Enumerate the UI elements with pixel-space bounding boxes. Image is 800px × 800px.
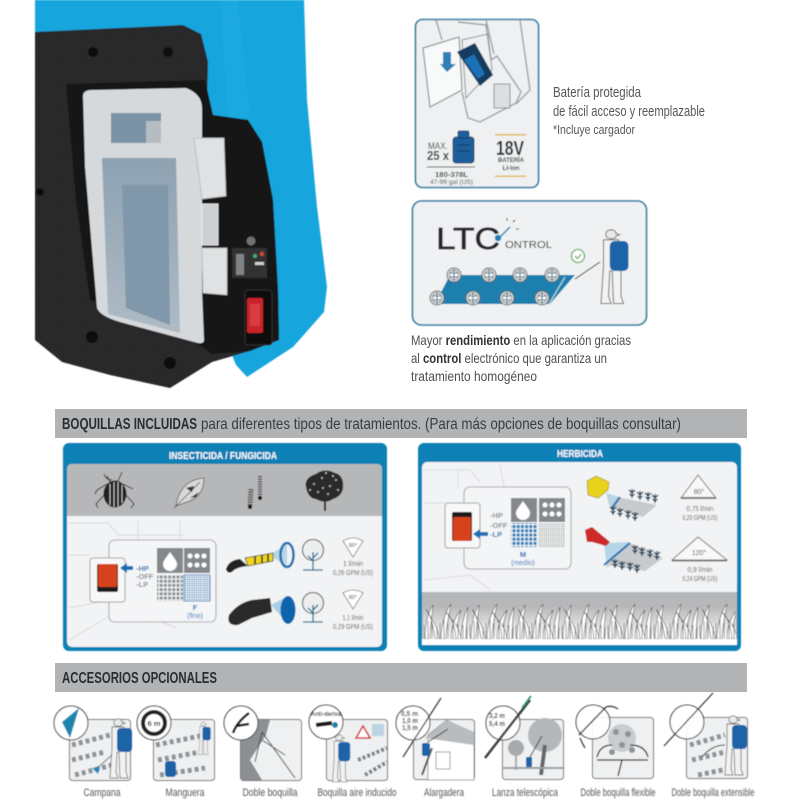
accessory: lanza telescopica: 3,2 m (489, 713, 505, 720)
18V badge (495, 134, 526, 177)
pressure labels: -LP (136, 580, 148, 589)
tree icon 1 (302, 540, 324, 570)
accessories row (54, 693, 754, 799)
spray angle and flow 1 (333, 538, 373, 577)
battery description text (553, 85, 705, 137)
pressure labels: -OFF (490, 521, 508, 530)
LTC description text: tratamiento homogéneo (411, 368, 537, 384)
panel title: HERBICIDA (557, 448, 603, 460)
accessory: doble boquilla: Doble boquilla (242, 787, 298, 799)
accessory: campana: Campana (84, 787, 121, 799)
panel title: INSECTICIDA / FUNGICIDA (169, 450, 277, 462)
spray angle 80 degrees: 0,75 l/min (686, 504, 714, 513)
pressure labels: -HP (490, 511, 503, 520)
battery card (416, 20, 538, 188)
grass illustration (423, 604, 736, 639)
pressure labels (136, 564, 154, 589)
spray angle and flow 2: 80° (349, 595, 357, 601)
battery description text: de fácil acceso y reemplazable (553, 104, 705, 120)
label seen through cover (111, 113, 161, 143)
heading: accesorios opcionales (55, 663, 747, 692)
18V badge: Li-Ion (502, 166, 520, 172)
nozzle 2: black full cone (228, 596, 296, 625)
spray angle 80 degrees: 80° (694, 488, 704, 496)
accessory: boquilla aire inducido: Boquilla aire inducido (318, 787, 396, 799)
accessory: alargadera: 1,5 m (402, 725, 418, 732)
accessory: alargadera (396, 698, 474, 799)
rocker switch HP (90, 558, 125, 602)
LTC control card (412, 201, 646, 325)
accessory: alargadera: 0,5 m (401, 711, 418, 718)
cover centre latch (202, 204, 218, 245)
black rear panel (35, 25, 279, 388)
cover tabs (194, 138, 227, 295)
accessory: doble boquilla extensible: Doble boquilla extensible (672, 787, 754, 799)
accessory: doble boquilla (224, 706, 302, 799)
battery core shadow (122, 185, 170, 325)
farmer with backpack sprayer (575, 230, 628, 304)
accessory: lanza telescopica (485, 696, 564, 799)
icon: battery being inserted (423, 20, 530, 122)
control display (232, 248, 267, 278)
droplet size tiles (157, 548, 210, 601)
pressure labels (490, 511, 508, 539)
droplet label: M (520, 550, 526, 559)
panel: herbicida (418, 443, 741, 651)
icon: damaged leaf (174, 478, 204, 508)
control card: fine droplet (90, 540, 216, 622)
pressure arrow (120, 563, 133, 573)
icon: green check (572, 250, 584, 262)
pressure arrow (473, 529, 488, 539)
LTC description text: Mayor rendimiento en la aplicación gracias (411, 332, 631, 348)
grass band (422, 592, 737, 639)
heading: accesorios opcionales: ACCESORIOS OPCIONALES (62, 670, 217, 687)
spray angle 120 degrees (672, 537, 727, 583)
heading: boquillas incluidas: para diferentes tipos de tratamientos. (Para más opciones de boquillas consultar) (201, 416, 681, 433)
18V badge: 18V (496, 138, 525, 160)
battery description text: *Incluye cargador (553, 122, 636, 137)
spray angle and flow 1: 1 l/min (343, 561, 363, 568)
accessory: doble boquilla flexible: Doble boquilla flexible (580, 787, 656, 799)
spray angle 120 degrees: 120° (692, 549, 706, 557)
capacity text (427, 141, 475, 186)
spray angle 120 degrees: 0,9 l/min (688, 565, 712, 574)
rocker switch LP (445, 503, 480, 548)
white strip under the grass (422, 639, 737, 645)
accessory: boquilla aire inducido (309, 705, 396, 799)
spray angle and flow 1: 0,26 GPM (US) (333, 570, 373, 577)
nozzle red with field (585, 527, 663, 573)
pressure labels: -HP (136, 564, 149, 573)
spray angle and flow 2: 0,29 GPM (US) (333, 624, 373, 631)
icon: larvae (248, 476, 262, 509)
pressure labels: -LP (490, 530, 502, 539)
capacity text: MAX. (428, 141, 448, 151)
accessory: alargadera: Alargadera (424, 787, 465, 799)
LTC description text (411, 332, 631, 384)
screws (36, 47, 176, 369)
accessory: alargadera: 1,0 m (402, 718, 418, 725)
LTC logo: LTC (436, 221, 500, 256)
battery seen through cover (102, 158, 180, 333)
sprayer outline backdrop (69, 520, 185, 640)
grass fade (423, 606, 736, 639)
accessory: doble boquilla flexible (576, 705, 656, 799)
spray angle 120 degrees: 0,24 GPM (US) (682, 574, 718, 583)
battery description text: Batería protegida (553, 85, 642, 101)
accessory: campana (54, 706, 132, 799)
power switch (245, 290, 272, 345)
droplet label: (medio) (511, 560, 535, 567)
droplet label: (fino) (187, 613, 203, 620)
spray angle 80 degrees: 0,20 GPM (US) (682, 513, 718, 522)
tank highlight (220, 0, 250, 118)
icon: battery capacity (453, 131, 474, 163)
accessory: lanza telescopica: Lanza telescópica (492, 787, 559, 799)
tree icon 2 (302, 592, 324, 622)
capacity text: 180-378L (435, 170, 468, 179)
accessory: manguera (137, 706, 214, 799)
sprayer outline backdrop (424, 465, 504, 590)
nozzle yellow with field (587, 476, 658, 521)
blue tank body (35, 0, 327, 377)
product photo: sprayer battery compartment (35, 0, 327, 388)
spray angle and flow 2 (333, 590, 373, 631)
accessory: manguera: 6 m (148, 719, 161, 728)
18V badge: BATERÍA (498, 156, 525, 164)
LTC logo: ONTROL (505, 240, 552, 251)
control card: medium droplet (445, 487, 571, 569)
heading: boquillas incluidas: BOQUILLAS INCLUIDAS (62, 416, 197, 433)
spray angle 80 degrees (681, 475, 718, 522)
droplet label (187, 603, 203, 620)
spray angle and flow 1: 80° (349, 543, 357, 549)
accessory: lanza telescopica: 5,4 m (489, 721, 505, 728)
icon: beetle (95, 472, 134, 508)
droplet size tiles (511, 498, 565, 547)
accessory: boquilla aire inducido: Anti-deriva (311, 711, 341, 718)
accessory: doble boquilla extensible (664, 693, 754, 799)
pressure labels: -OFF (136, 572, 154, 581)
capacity text: 47-99 gal (US) (430, 180, 473, 186)
pest band (67, 464, 382, 516)
sprayed field (430, 268, 575, 305)
droplet label: F (193, 603, 198, 612)
capacity text: 25 x (427, 148, 450, 163)
translucent battery cover (83, 88, 227, 343)
heading: boquillas incluidas (55, 409, 747, 438)
panel: insecticida / fungicida (63, 443, 387, 651)
accessory: manguera: Manguera (166, 787, 205, 799)
black compartment housing (66, 80, 279, 354)
icon: tree (306, 470, 343, 511)
LTC logo (436, 218, 552, 256)
spray angle and flow 2: 1,1 l/min (342, 615, 364, 622)
droplet label (511, 550, 535, 567)
LTC description text: al control electrónico que garantiza un (411, 350, 607, 366)
nozzle 1: yellow hollow cone (226, 543, 294, 573)
